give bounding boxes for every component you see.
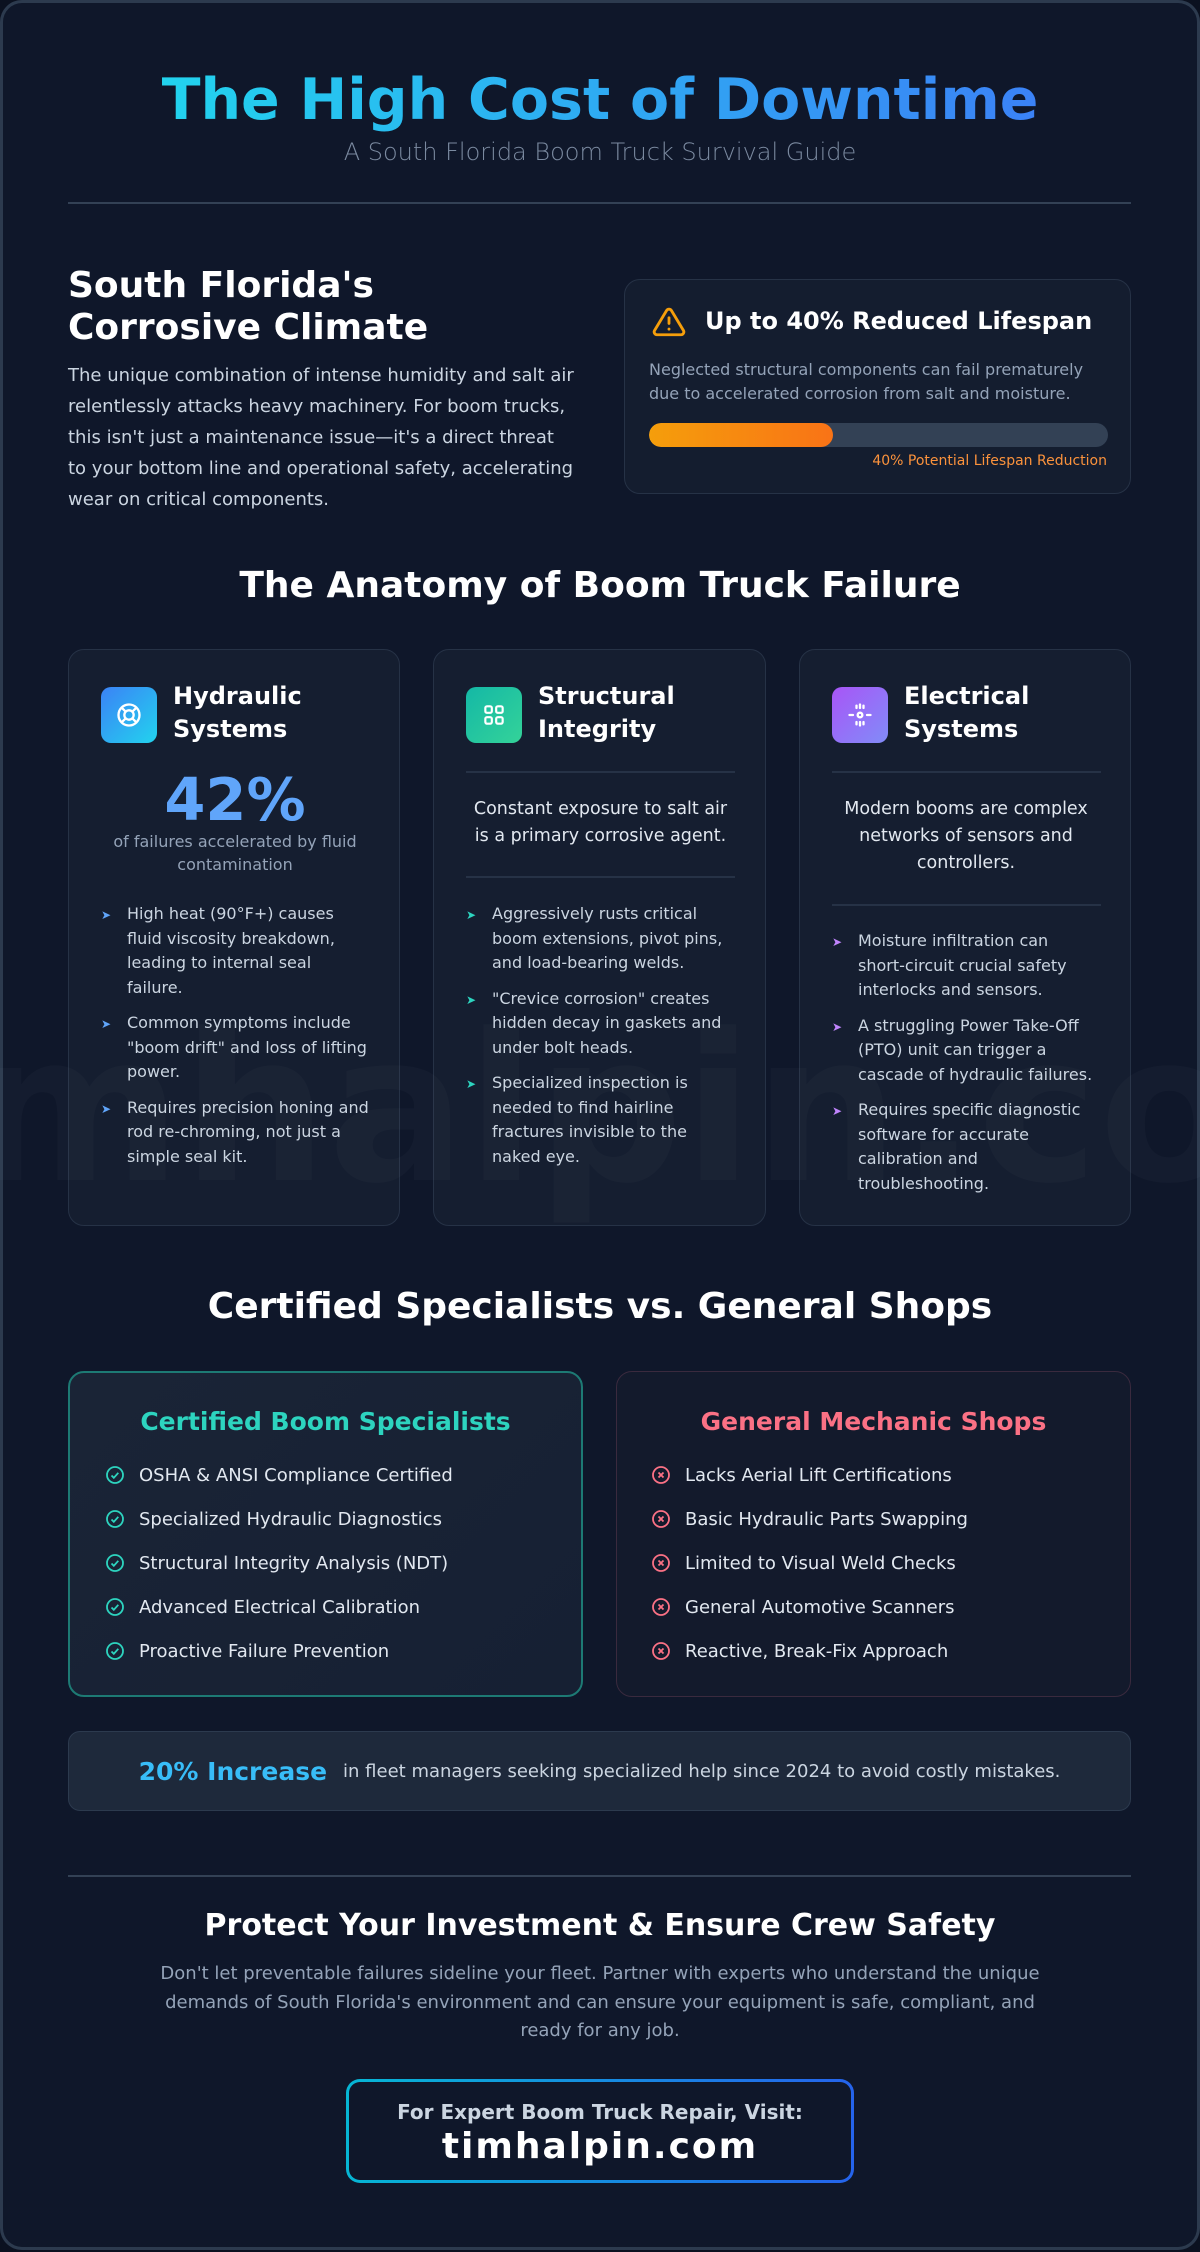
subtitle: A South Florida Boom Truck Survival Guide xyxy=(344,138,856,166)
bullets: Aggressively rusts critical boom extensions, pivot pins, and load-bearing welds. xyxy=(492,904,722,972)
bullets: Requires precision honing and rod re-chroming, not just a simple seal kit. xyxy=(127,1098,369,1166)
CTA box xyxy=(346,2079,854,2183)
stat bar: 20% increase: 20% Increase xyxy=(139,1756,327,1786)
bullets xyxy=(833,931,1092,1192)
panel heading: Certified Boom Specialists xyxy=(140,1407,511,1436)
card title: Structural xyxy=(538,682,675,710)
bullets xyxy=(467,904,722,1166)
panel heading: General Mechanic Shops xyxy=(701,1407,1046,1436)
card title xyxy=(173,682,302,743)
CTA box: timhalpin.com xyxy=(442,2126,758,2167)
intro text: Modern booms are complex networks of sensors and controllers. xyxy=(844,799,1088,873)
x-list: Basic Hydraulic Parts Swapping xyxy=(685,1508,968,1530)
x-list: General Automotive Scanners xyxy=(685,1596,955,1618)
panel: certified specialists xyxy=(68,1371,583,1697)
stat: 42%: 42% xyxy=(164,765,306,834)
stat bar: 20% increase: in fleet managers seeking specialized help since 2024 to avoid costly mistakes. xyxy=(343,1760,1060,1782)
checklist: Structural Integrity Analysis (NDT) xyxy=(139,1552,448,1574)
bullets: "Crevice corrosion" creates hidden decay in gaskets and under bolt heads. xyxy=(492,988,721,1056)
icon: electrical xyxy=(832,687,888,743)
card title: Systems xyxy=(904,715,1018,743)
stat caption: of failures accelerated by fluid contamination xyxy=(113,832,357,874)
icon: warning xyxy=(652,308,686,336)
bullets: Requires specific diagnostic software for accurate calibration and troubleshooting. xyxy=(858,1100,1080,1192)
checklist: OSHA & ANSI Compliance Certified xyxy=(139,1464,453,1486)
title: The High Cost of Downtime xyxy=(162,67,1038,133)
bullets: High heat (90°F+) causes fluid viscosity breakdown, leading to internal seal failure. xyxy=(127,904,335,996)
bullets: Moisture infiltration can short‑circuit crucial safety interlocks and sensors. xyxy=(858,931,1067,999)
card title: Integrity xyxy=(538,715,656,743)
panel: hydraulic xyxy=(68,649,400,1226)
heading: anatomy: The Anatomy of Boom Truck Failure xyxy=(239,565,961,606)
heading: comparison: Certified Specialists vs. General Shops xyxy=(208,1286,992,1327)
callout text: Neglected structural components can fail prematurely due to accelerated corrosion from salt and moisture. xyxy=(649,360,1083,403)
checklist: Specialized Hydraulic Diagnostics xyxy=(139,1508,442,1530)
CTA box: For Expert Boom Truck Repair, Visit: xyxy=(397,2100,803,2124)
closing text: Don't let preventable failures sideline your fleet. Partner with experts who understand the unique demands of South Florida's environment and can ensure your equipment is safe, compliant, and ready for any job. xyxy=(160,1963,1040,2041)
panel: structural xyxy=(433,649,766,1226)
bullets: A struggling Power Take-Off (PTO) unit can trigger a cascade of hydraulic failures. xyxy=(858,1016,1092,1084)
x-list: Reactive, Break-Fix Approach xyxy=(685,1640,948,1662)
checklist xyxy=(106,1464,453,1662)
checklist: Proactive Failure Prevention xyxy=(139,1640,389,1662)
card title: Hydraulic xyxy=(173,682,302,710)
heading: corrosive climate: South Florida's xyxy=(68,265,374,306)
panel: lifespan callout xyxy=(624,279,1131,494)
icon: hydraulic xyxy=(101,687,157,743)
bar label: 40% Potential Lifespan Reduction xyxy=(872,453,1107,469)
card title xyxy=(538,682,675,743)
bullets xyxy=(102,904,369,1166)
heading: corrosive climate: Corrosive Climate xyxy=(68,307,428,348)
card title xyxy=(904,682,1029,743)
progress bar xyxy=(649,423,1108,447)
callout heading: Up to 40% Reduced Lifespan xyxy=(705,307,1092,335)
panel: general shops xyxy=(616,1371,1131,1697)
x-list: Limited to Visual Weld Checks xyxy=(685,1552,956,1574)
x-list: Lacks Aerial Lift Certifications xyxy=(685,1464,952,1486)
card title: Systems xyxy=(173,715,287,743)
x-list xyxy=(652,1464,968,1662)
heading: protect: Protect Your Investment & Ensure Crew Safety xyxy=(205,1908,995,1943)
bullets: Common symptoms include "boom drift" and loss of lifting power. xyxy=(127,1013,367,1081)
panel: electrical xyxy=(799,649,1131,1226)
bullets: Specialized inspection is needed to find hairline fractures invisible to the naked eye. xyxy=(492,1073,688,1166)
heading: corrosive climate xyxy=(68,265,428,348)
text: climate description: The unique combination of intense humidity and salt air relentlessly attacks heavy machinery. For boom trucks, this isn't just a maintenance issue—it's a direct threat to your bottom line and operational safety, accelerating wear on critical components. xyxy=(68,365,574,510)
checklist: Advanced Electrical Calibration xyxy=(139,1596,420,1618)
intro text: Constant exposure to salt air is a primary corrosive agent. xyxy=(474,799,727,846)
icon: structural xyxy=(466,687,522,743)
stat bar: 20% increase xyxy=(68,1731,1131,1811)
card title: Electrical xyxy=(904,682,1029,710)
